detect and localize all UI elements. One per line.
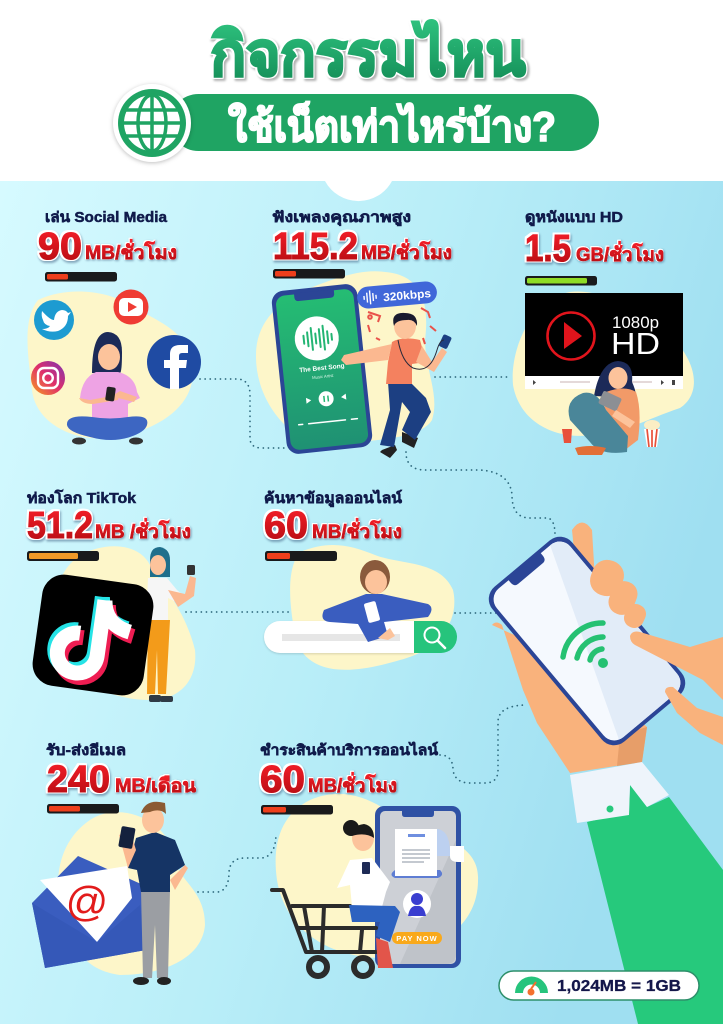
value: 60 MB per hour (264, 505, 402, 547)
video player: HD (611, 326, 660, 361)
badge: 320kbps (356, 281, 438, 309)
value: 115.2 MB per hour: 115.2 (273, 226, 358, 268)
cuff (570, 762, 669, 823)
person: girl with tablet (569, 361, 640, 455)
person: man with phone (118, 802, 188, 985)
sleeve (587, 785, 723, 1024)
person: woman leaning (322, 560, 432, 642)
value: 115.2 MB per hour: MB/ชั่วโมง (361, 239, 452, 264)
progress bar: music (273, 269, 345, 278)
panel: email (32, 742, 205, 985)
value: 60 MB per hour (260, 759, 397, 801)
blob: email (58, 812, 205, 975)
value: 90 MB per hour (38, 226, 177, 268)
phone: wifi screen (488, 536, 686, 746)
heading: online search: ค้นหาข้อมูลออนไลน์ (264, 489, 402, 507)
icon: music notes (368, 308, 436, 344)
progress bar: social media (45, 272, 117, 282)
badge: 320kbps: 320kbps (383, 288, 432, 304)
title banner (170, 94, 599, 151)
heading: music: ฟังเพลงคุณภาพสูง (272, 210, 411, 226)
legend text: 1,024MB = 1GB (557, 978, 681, 995)
video player (525, 293, 683, 389)
value: 1.5 GB per hour: GB/ชั่วโมง (576, 241, 664, 266)
person: man dancing (341, 313, 452, 458)
icon: shopping cart (272, 890, 376, 976)
panel: hd movie (513, 210, 694, 455)
value: 90 MB per hour: MB/ชั่วโมง (85, 239, 177, 264)
phone: music player (271, 283, 373, 455)
header white panel with notch (0, 0, 723, 201)
person: woman shopping (337, 820, 400, 968)
panel: music (256, 210, 452, 458)
progress bar: hd movie (525, 276, 597, 286)
icon: wifi (563, 623, 606, 666)
icon: youtube (114, 290, 148, 324)
heading: email: รับ-ส่งอีเมล (46, 742, 126, 759)
phone: music player: The Best Song (299, 363, 345, 374)
phone: payment (375, 806, 464, 968)
value: 60 MB per hour: 60 (264, 505, 308, 547)
blob: tiktok (55, 546, 195, 700)
envelope: @ (66, 878, 108, 925)
icon: popcorn (644, 420, 660, 447)
connector: dotted paths (186, 377, 555, 892)
blob: social media (28, 292, 193, 439)
panel: tiktok (27, 489, 196, 702)
value: 240 MB per month (47, 759, 196, 801)
holding hand (492, 622, 647, 773)
back thumb (572, 522, 595, 580)
icon: tiktok (30, 572, 156, 698)
fingers (586, 556, 723, 745)
progress bar: tiktok (27, 551, 99, 561)
icon: instagram (31, 361, 65, 395)
value: 60 MB per hour: MB/ชั่วโมง (308, 772, 397, 797)
panel: online payment (260, 741, 478, 976)
phone: music player: Music Artist (312, 373, 335, 380)
icon: drink cup (562, 429, 572, 443)
value: 240 MB per month: MB/เดือน (115, 775, 196, 797)
blob: hd movie (513, 292, 694, 436)
panel: big phone in hands (482, 522, 723, 1024)
progress bar: online search (265, 551, 337, 561)
search bar (264, 621, 457, 653)
progress bar: email (47, 804, 119, 814)
icon: speed gauge (515, 976, 548, 996)
value: 1.5 GB per hour: 1.5 (525, 228, 571, 270)
value: 60 MB per hour: MB/ชั่วโมง (312, 518, 402, 543)
blob: online payment (276, 794, 478, 958)
value: 240 MB per month: 240 (47, 759, 110, 801)
blob: music (256, 271, 434, 445)
title: line two: ใช้เน็ตเท่าไหร่บ้าง? (228, 101, 556, 150)
panel: online search (264, 489, 457, 670)
heading: online payment: ชำระสินค้าบริการออนไลน์ (260, 741, 438, 759)
value: 90 MB per hour: 90 (38, 226, 82, 268)
title: line one: กิจกรรมไหน (210, 19, 526, 88)
video player: 1080p (612, 314, 659, 332)
panel: social media (28, 210, 201, 444)
heading: social media: เล่น Social Media (45, 210, 168, 226)
heading: tiktok: ท่องโลก TikTok (27, 489, 137, 507)
value: 51.2 MB per hour: 51.2 (27, 505, 93, 547)
blob: online search (290, 545, 454, 670)
value: 1.5 GB per hour (525, 228, 664, 270)
person: girl sitting (67, 332, 147, 444)
icon: facebook (147, 335, 201, 389)
icon: globe (113, 84, 191, 162)
value: 115.2 MB per hour (273, 226, 452, 268)
value: 51.2 MB per hour: MB /ชั่วโมง (95, 518, 191, 543)
icon: magnifier (424, 628, 445, 648)
value: 60 MB per hour: 60 (260, 759, 305, 801)
icon: twitter (34, 300, 74, 340)
value: 51.2 MB per hour (27, 505, 191, 547)
heading: hd movie: ดูหนังแบบ HD (525, 210, 623, 226)
progress bar: online payment (261, 805, 333, 814)
envelope (32, 856, 150, 968)
legend: 1,024MB = 1GB (499, 971, 699, 1000)
phone: payment: PAY NOW (396, 934, 438, 943)
person: woman with phone (146, 547, 196, 702)
